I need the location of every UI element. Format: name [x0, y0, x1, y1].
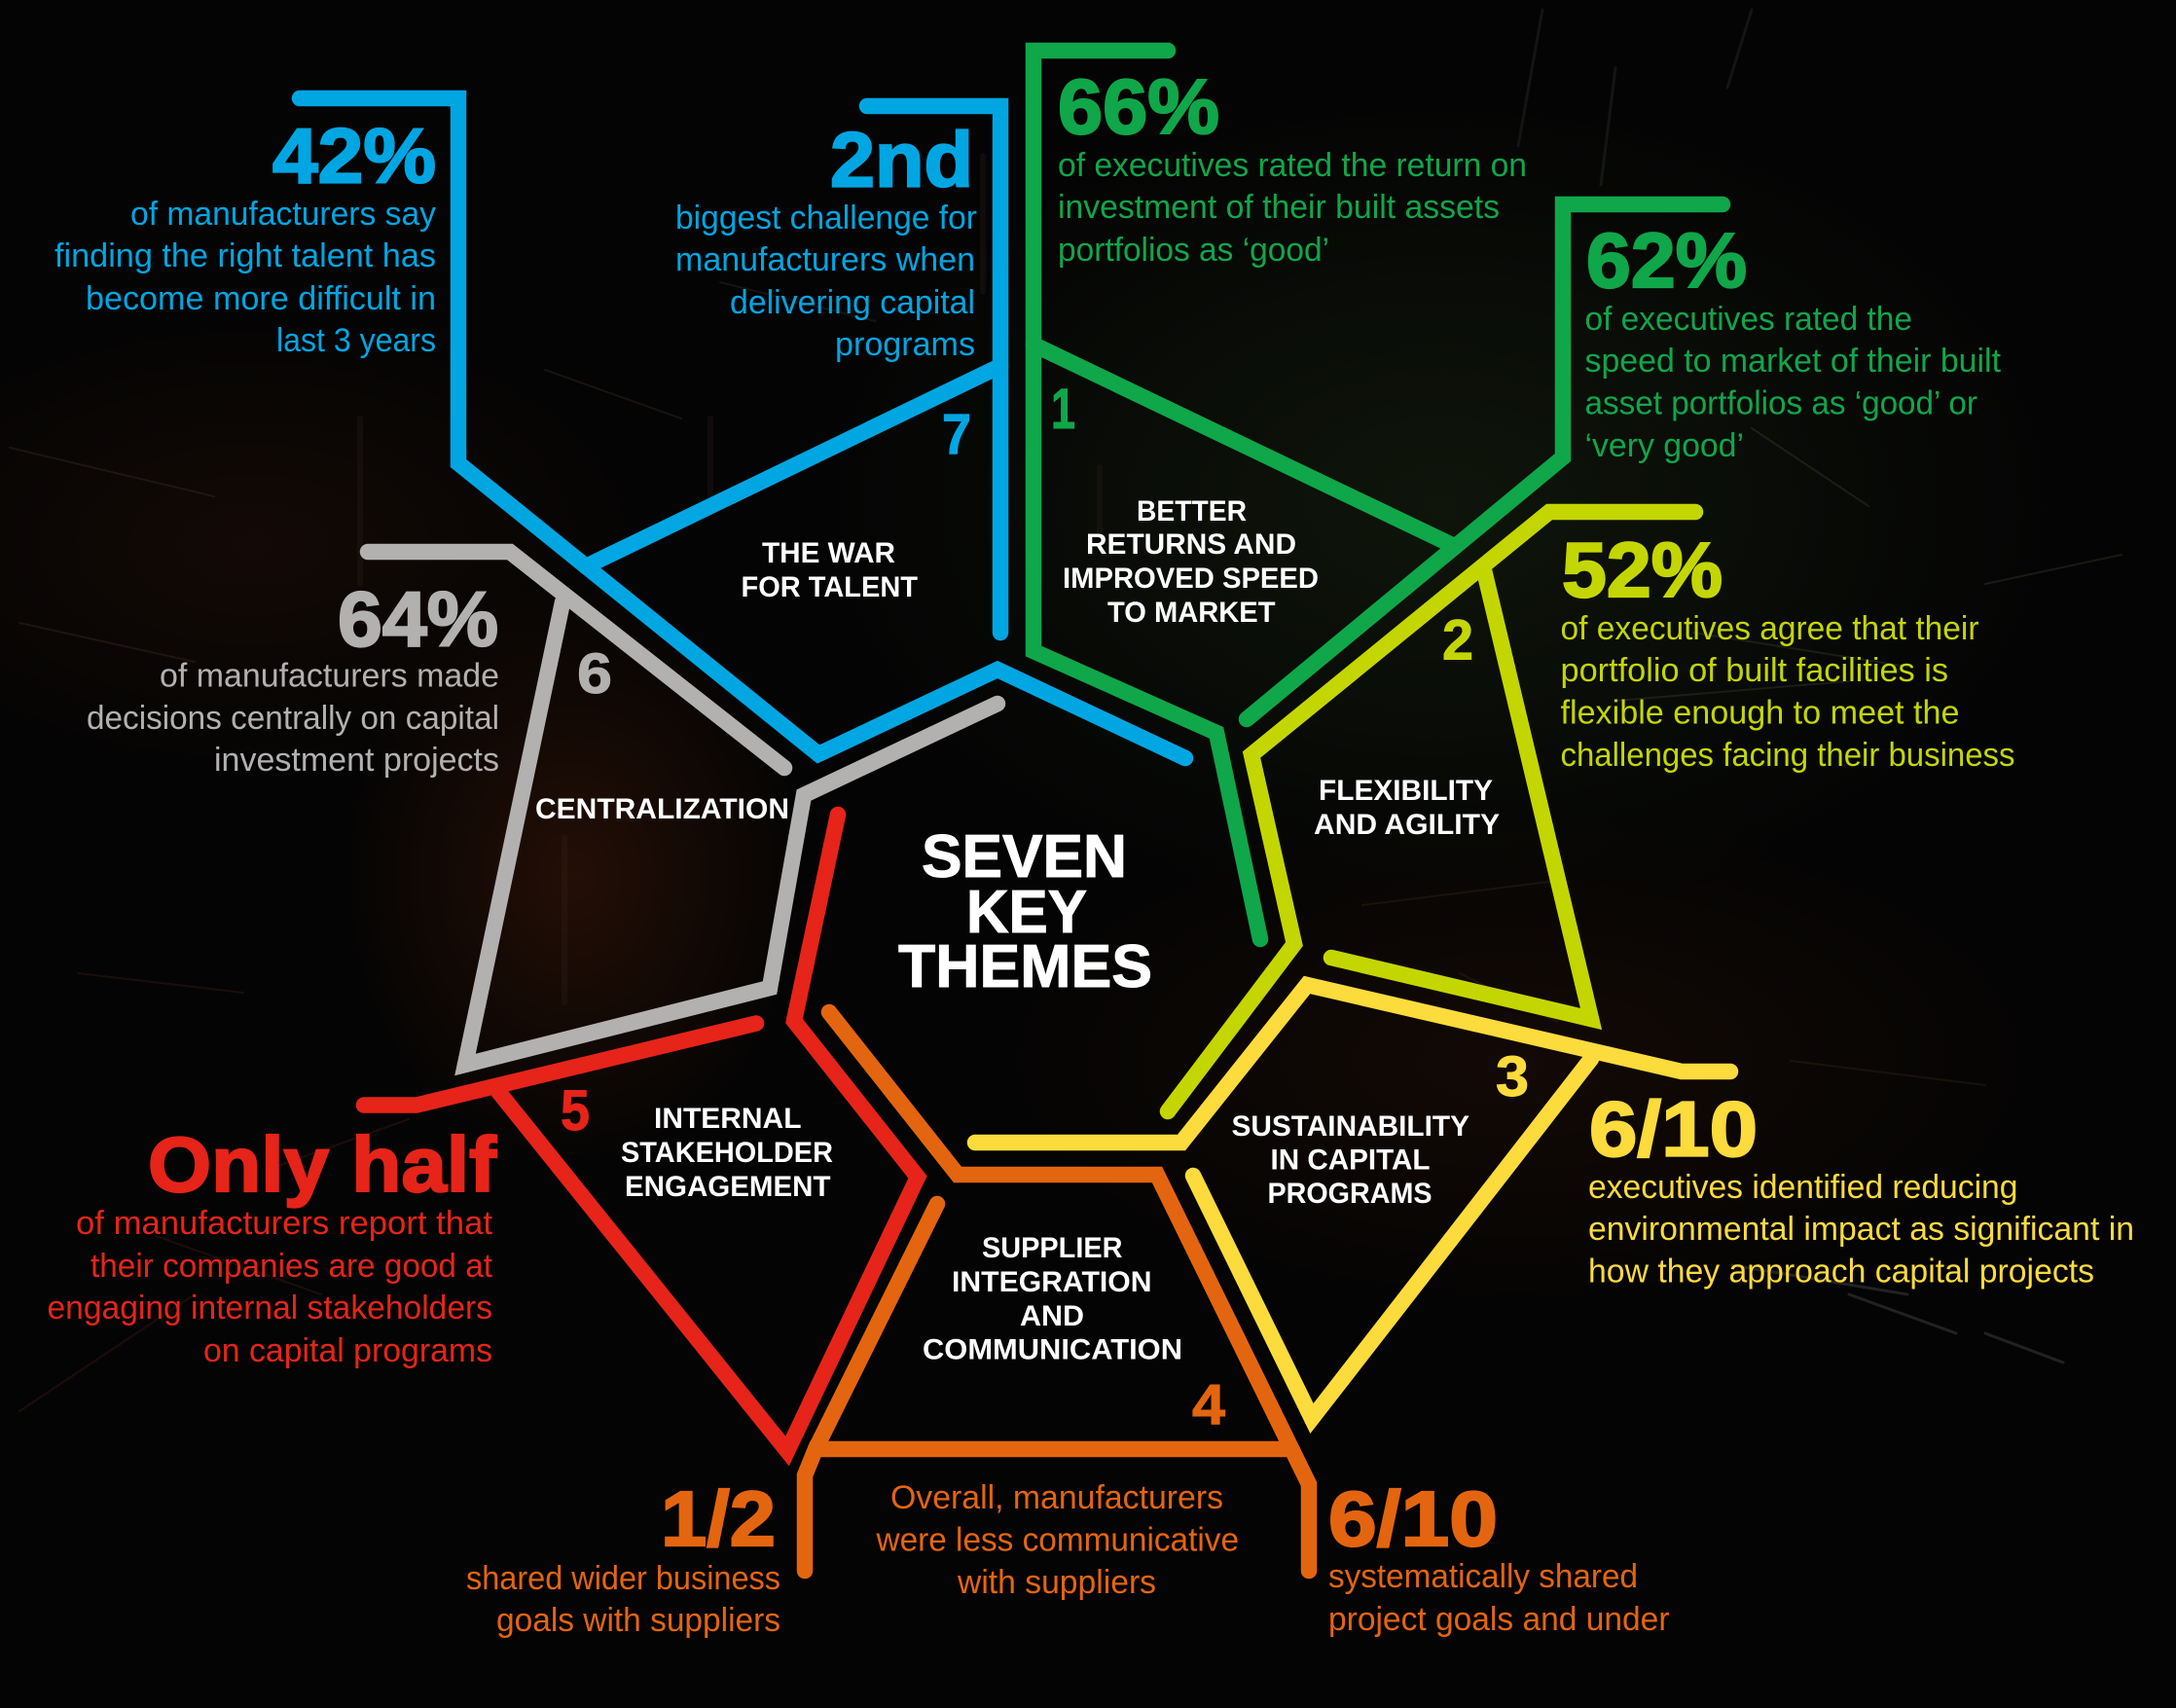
text: grey description: investment projects	[214, 742, 499, 779]
text: 62% description: asset portfolios as ‘good’ or	[1584, 385, 1977, 422]
text: 66% description: of executives rated the return on	[1058, 147, 1527, 184]
text: 2nd description	[675, 200, 977, 363]
outline: blue theme 7	[300, 98, 1185, 758]
text: 66% description	[1058, 147, 1527, 269]
text: grey description: of manufacturers made	[160, 658, 499, 695]
panel: theme 4 supplier integration	[466, 1012, 1670, 1639]
stat: 1/2: 1/2	[661, 1475, 776, 1562]
label: the war for talent	[742, 537, 918, 603]
label: supplier integration and communication: SUPPLIER	[982, 1232, 1123, 1264]
stat: 52%: 52%	[1562, 527, 1723, 613]
outline: orange theme 4	[805, 1012, 1309, 1571]
text: only half description	[47, 1205, 493, 1369]
title: seven key themes: THEMES	[898, 933, 1152, 1000]
outline: red theme 5	[364, 815, 918, 1459]
outline: lime theme 2	[1168, 512, 1695, 1111]
text: 66% description: investment of their built assets	[1058, 189, 1500, 226]
stat: only half: Only half	[148, 1121, 496, 1208]
text: grey description: decisions centrally on capital	[87, 700, 499, 737]
label: internal stakeholder engagement: STAKEHOLDER	[621, 1137, 833, 1169]
title: seven key themes: SEVEN	[922, 823, 1127, 890]
text: overall summary: were less communicative	[876, 1522, 1239, 1559]
panel: theme 2 flexibility	[1168, 512, 2014, 1111]
text: 52% description: of executives agree that their	[1561, 610, 1979, 647]
stat: 64%: 64%	[338, 576, 498, 662]
outline: grey theme 6	[368, 552, 997, 1072]
text: overall summary: Overall, manufacturers	[890, 1479, 1223, 1516]
label: flexibility and agility: AND AGILITY	[1314, 809, 1500, 841]
label: better returns and improved speed to market: TO MARKET	[1107, 597, 1275, 629]
text: overall summary	[876, 1479, 1239, 1601]
stat: 2nd: 2nd	[830, 117, 973, 202]
label: centralization: CENTRALIZATION	[535, 793, 789, 825]
label: flexibility and agility: FLEXIBILITY	[1319, 775, 1493, 807]
text: 66% description: portfolios as ‘good’	[1058, 232, 1329, 269]
number 3: 3	[1496, 1045, 1529, 1108]
text: only half description: engaging internal stakeholders	[47, 1290, 492, 1326]
text: 6/10 yellow description	[1588, 1169, 2134, 1290]
label: better returns and improved speed to market: BETTER	[1137, 495, 1247, 527]
text: 42% description	[54, 196, 436, 359]
text: overall summary: with suppliers	[957, 1564, 1156, 1601]
number 4: 4	[1192, 1373, 1225, 1436]
text: 6/10 orange description: project goals and under	[1328, 1601, 1670, 1638]
text: 62% description: of executives rated the	[1584, 301, 1912, 338]
label: sustainability in capital programs	[1232, 1110, 1469, 1210]
text: 52% description	[1561, 610, 2014, 774]
label: sustainability in capital programs: SUSTAINABILITY	[1232, 1110, 1469, 1143]
label: internal stakeholder engagement	[621, 1103, 833, 1203]
text: 1/2 description	[466, 1560, 780, 1639]
text: 2nd description: programs	[835, 326, 975, 363]
number 5: 5	[561, 1079, 590, 1143]
text: 1/2 description: shared wider business	[466, 1560, 780, 1597]
text: grey description	[87, 658, 499, 779]
stat: 6/10 yellow: 6/10	[1589, 1086, 1758, 1172]
number 1: 1	[1051, 378, 1075, 441]
outline: green theme 1	[1034, 51, 1723, 939]
text: 1/2 description: goals with suppliers	[496, 1602, 780, 1639]
label: supplier integration and communication: INTEGRATION	[952, 1266, 1152, 1298]
text: 62% description	[1584, 301, 2002, 464]
stat: 66%: 66%	[1058, 63, 1219, 150]
panel: theme 1 better returns	[1034, 51, 2002, 939]
label: supplier integration and communication: AND	[1020, 1300, 1084, 1332]
text: 6/10 orange description	[1328, 1558, 1670, 1638]
stat: 6/10 orange: 6/10	[1328, 1475, 1498, 1562]
label: sustainability in capital programs: IN CAPITAL	[1271, 1145, 1431, 1176]
number 6: 6	[577, 642, 612, 706]
text: 42% description: last 3 years	[276, 322, 436, 359]
number 2: 2	[1442, 609, 1473, 672]
text: 2nd description: manufacturers when	[675, 241, 975, 278]
panel: theme 5 internal stakeholder engagement	[47, 815, 918, 1459]
label: internal stakeholder engagement: INTERNAL	[654, 1103, 802, 1135]
stat: 42%: 42%	[272, 113, 436, 199]
text: 62% description: speed to market of their built	[1584, 343, 2002, 380]
title: seven key themes: KEY	[966, 879, 1087, 946]
text: 62% description: ‘very good’	[1584, 427, 1744, 464]
outline: yellow theme 3	[975, 985, 1730, 1427]
label: flexibility and agility	[1314, 775, 1500, 841]
text: only half description: on capital programs	[203, 1332, 492, 1369]
text: 52% description: portfolio of built facilities is	[1561, 652, 1948, 689]
text: 42% description: finding the right talent has	[54, 237, 436, 274]
label: better returns and improved speed to market: IMPROVED SPEED	[1063, 563, 1319, 595]
text: 6/10 orange description: systematically shared	[1328, 1558, 1638, 1595]
text: 52% description: challenges facing their business	[1561, 737, 2014, 774]
text: 2nd description: delivering capital	[730, 284, 975, 321]
text: 6/10 yellow description: how they approach capital projects	[1588, 1254, 2094, 1290]
label: better returns and improved speed to market: RETURNS AND	[1086, 528, 1296, 561]
text: 6/10 yellow description: executives identified reducing	[1588, 1169, 2018, 1206]
label: the war for talent: THE WAR	[762, 537, 895, 569]
panel: theme 3 sustainability	[975, 985, 2134, 1427]
text: 42% description: become more difficult in	[86, 280, 436, 317]
label: supplier integration and communication: COMMUNICATION	[923, 1333, 1182, 1366]
text: 52% description: flexible enough to meet the	[1561, 695, 1960, 732]
title: seven key themes	[898, 823, 1152, 1000]
label: the war for talent: FOR TALENT	[742, 571, 918, 603]
text: 42% description: of manufacturers say	[130, 196, 436, 233]
label: better returns and improved speed to market	[1063, 495, 1319, 629]
text: only half description: their companies are good at	[91, 1248, 493, 1285]
text: 6/10 yellow description: environmental impact as significant in	[1588, 1211, 2134, 1248]
number 7: 7	[942, 403, 971, 466]
text: 2nd description: biggest challenge for	[675, 200, 977, 236]
label: supplier integration and communication	[923, 1232, 1182, 1366]
label: internal stakeholder engagement: ENGAGEMENT	[625, 1171, 831, 1203]
text: only half description: of manufacturers report that	[76, 1205, 493, 1242]
panel: theme 6 centralization	[87, 552, 997, 1072]
panel: theme 7 the war for talent	[54, 98, 1185, 758]
label: sustainability in capital programs: PROGRAMS	[1267, 1178, 1433, 1210]
stat: 62%: 62%	[1586, 217, 1747, 304]
